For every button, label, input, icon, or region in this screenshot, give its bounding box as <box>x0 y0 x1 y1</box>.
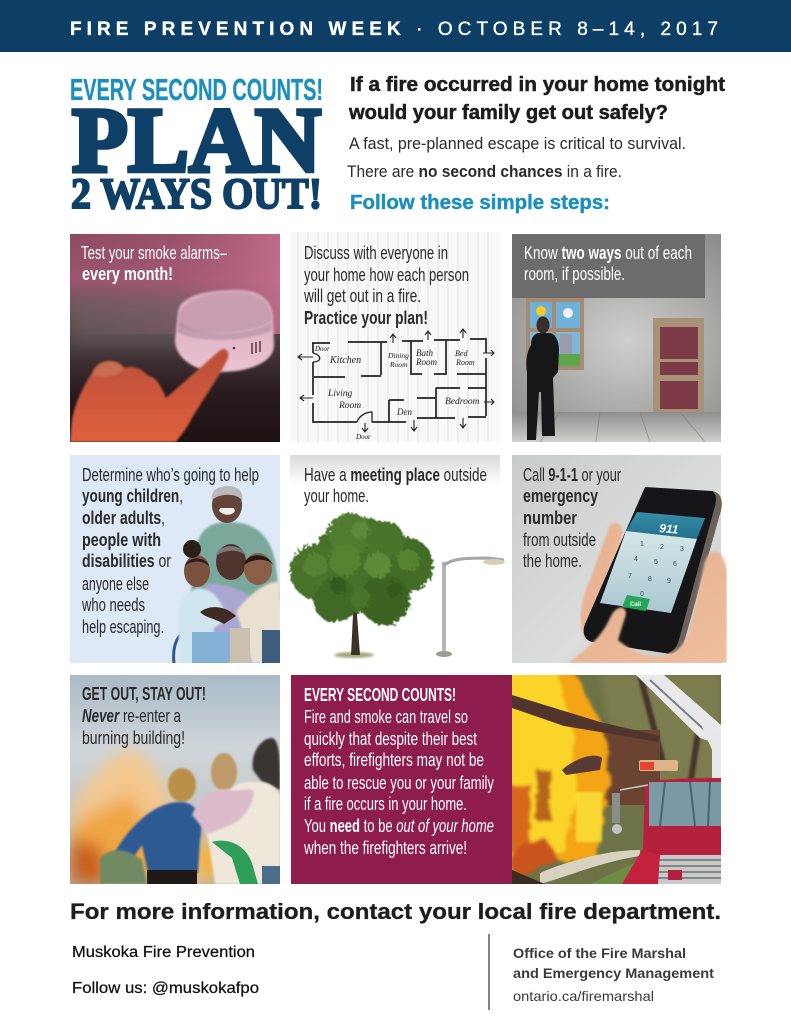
photo: hands holding phone: 0 <box>640 591 644 598</box>
hand-drawn floor plan: Door <box>314 345 330 353</box>
caption: will get out in a fire. <box>303 286 421 306</box>
hand-drawn floor plan: Dining <box>387 351 409 360</box>
caption: people with <box>82 530 161 550</box>
photo: burning house and fire truck <box>506 670 721 885</box>
caption: your home. <box>304 486 369 506</box>
magenta text block <box>291 675 512 884</box>
panel: meeting place <box>290 455 505 658</box>
photo: hands holding phone: 1 <box>640 541 644 548</box>
caption: Test your smoke alarms– <box>81 243 227 263</box>
caption: Discuss with everyone in <box>304 243 448 263</box>
caption: burning building! <box>82 728 185 748</box>
caption <box>524 243 692 284</box>
hand-drawn floor plan <box>298 329 494 441</box>
panel: discuss and practice plan <box>290 232 500 442</box>
photo: family with wheelchair <box>70 455 280 663</box>
photo: hands holding phone: 911 <box>659 521 679 537</box>
panel: every second counts <box>291 670 721 885</box>
hand-drawn floor plan: Room <box>389 360 408 369</box>
caption: emergency <box>523 486 598 506</box>
hand-drawn floor plan: Bath <box>416 348 433 358</box>
hand-drawn floor plan: Room <box>455 358 475 367</box>
caption: Never re-enter a <box>82 706 182 726</box>
photo: family watching fire <box>70 675 280 884</box>
caption: who needs <box>81 595 145 615</box>
caption: You need to be out of your home <box>304 816 494 836</box>
caption <box>81 465 259 637</box>
caption <box>81 243 227 284</box>
caption: EVERY SECOND COUNTS! <box>304 685 456 705</box>
caption: GET OUT, STAY OUT! <box>82 684 206 704</box>
every second counts kicker: EVERY SECOND COUNTS! <box>70 72 323 107</box>
photo: tree and street lamp <box>290 455 505 658</box>
caption <box>303 243 469 328</box>
campaign title <box>70 72 323 218</box>
photo: hands holding phone: 8 <box>648 576 652 583</box>
hand-drawn floor plan: Bedroom <box>445 397 480 407</box>
banner title: FIRE PREVENTION WEEK · OCTOBER 8–14, 2017 <box>70 19 718 40</box>
panel: who helps <box>70 455 280 663</box>
lined paper background <box>290 232 500 442</box>
caption band <box>512 234 705 298</box>
photo: hands holding phone: 4 <box>634 556 638 563</box>
photo: hands holding phone: 6 <box>673 561 677 568</box>
caption: older adults, <box>82 508 165 528</box>
intro text <box>347 74 725 214</box>
caption: able to rescue you or your family <box>304 773 494 793</box>
header banner <box>0 0 791 52</box>
caption: quickly that despite their best <box>304 729 477 749</box>
follow steps heading: Follow these simple steps: <box>350 192 610 214</box>
caption: your home how each person <box>304 265 469 285</box>
hand-drawn floor plan: Bed <box>455 349 468 358</box>
fire marshal office: Office of the Fire Marshal <box>513 945 686 961</box>
caption: Determine who’s going to help <box>82 465 259 485</box>
plan wordmark: PLAN <box>72 89 321 191</box>
hand-drawn floor plan: Room <box>415 357 437 367</box>
caption: the home. <box>523 551 582 571</box>
photo: hands holding phone: 3 <box>680 546 684 553</box>
question heading: If a fire occurred in your home tonight <box>350 74 725 96</box>
photo: hands holding phone: 9 <box>667 578 671 585</box>
local contact: Muskoka Fire Prevention <box>72 944 255 961</box>
hand-drawn floor plan: Room <box>338 401 361 411</box>
caption: when the firefighters arrive! <box>303 838 467 858</box>
panel: know two ways out <box>512 234 721 442</box>
panel: call 9-1-1 <box>512 455 727 663</box>
caption: help escaping. <box>82 617 164 637</box>
fire marshal office <box>513 945 714 1004</box>
intro sentences: There are no second chances in a fire. <box>347 162 622 181</box>
caption: room, if possible. <box>524 264 625 284</box>
caption: if a fire occurs in your home. <box>304 794 467 814</box>
caption: from outside <box>523 530 596 550</box>
caption <box>523 465 621 571</box>
caption: Have a meeting place outside <box>304 465 487 485</box>
photo: hands holding phone: 7 <box>628 573 632 580</box>
caption <box>304 465 487 506</box>
caption: disabilities or <box>82 551 171 571</box>
question heading <box>348 74 725 124</box>
panel: get out stay out <box>70 675 280 884</box>
hand-drawn floor plan: Kitchen <box>329 355 361 366</box>
photo: hands holding phone: 5 <box>654 559 658 566</box>
photo: hands holding phone <box>512 455 727 663</box>
caption: number <box>523 508 577 528</box>
question heading: would your family get out safely? <box>348 102 668 124</box>
photo: man looking at window and door <box>512 234 721 442</box>
hand-drawn floor plan: Living <box>327 389 353 399</box>
caption: Know two ways out of each <box>524 243 692 263</box>
photo: finger pressing smoke alarm <box>70 234 280 442</box>
local contact: Follow us: @muskokafpo <box>72 980 259 997</box>
panel: test smoke alarms <box>70 234 280 442</box>
local contact <box>72 944 259 997</box>
contact line: For more information, contact your local fire department. <box>70 899 721 924</box>
intro sentences <box>347 134 686 181</box>
caption: every month! <box>82 264 173 284</box>
intro sentences: A fast, pre-planned escape is critical to survival. <box>349 134 686 153</box>
fire marshal office: and Emergency Management <box>513 965 714 981</box>
caption: Practice your plan! <box>304 308 428 328</box>
caption: Fire and smoke can travel so <box>304 707 468 727</box>
caption: efforts, firefighters may not be <box>304 750 484 770</box>
hand-drawn floor plan: Door <box>355 433 371 441</box>
caption: young children, <box>82 486 183 506</box>
2 ways out wordmark: 2 WAYS OUT! <box>71 171 322 218</box>
photo: hands holding phone: Call <box>630 602 641 608</box>
caption <box>303 685 494 858</box>
photo: hands holding phone: 2 <box>660 544 664 551</box>
caption: Call 9-1-1 or your <box>523 465 621 485</box>
fire marshal office: ontario.ca/firemarshal <box>513 988 654 1004</box>
caption <box>82 684 206 748</box>
hand-drawn floor plan: Den <box>396 407 412 417</box>
caption: anyone else <box>82 574 149 594</box>
